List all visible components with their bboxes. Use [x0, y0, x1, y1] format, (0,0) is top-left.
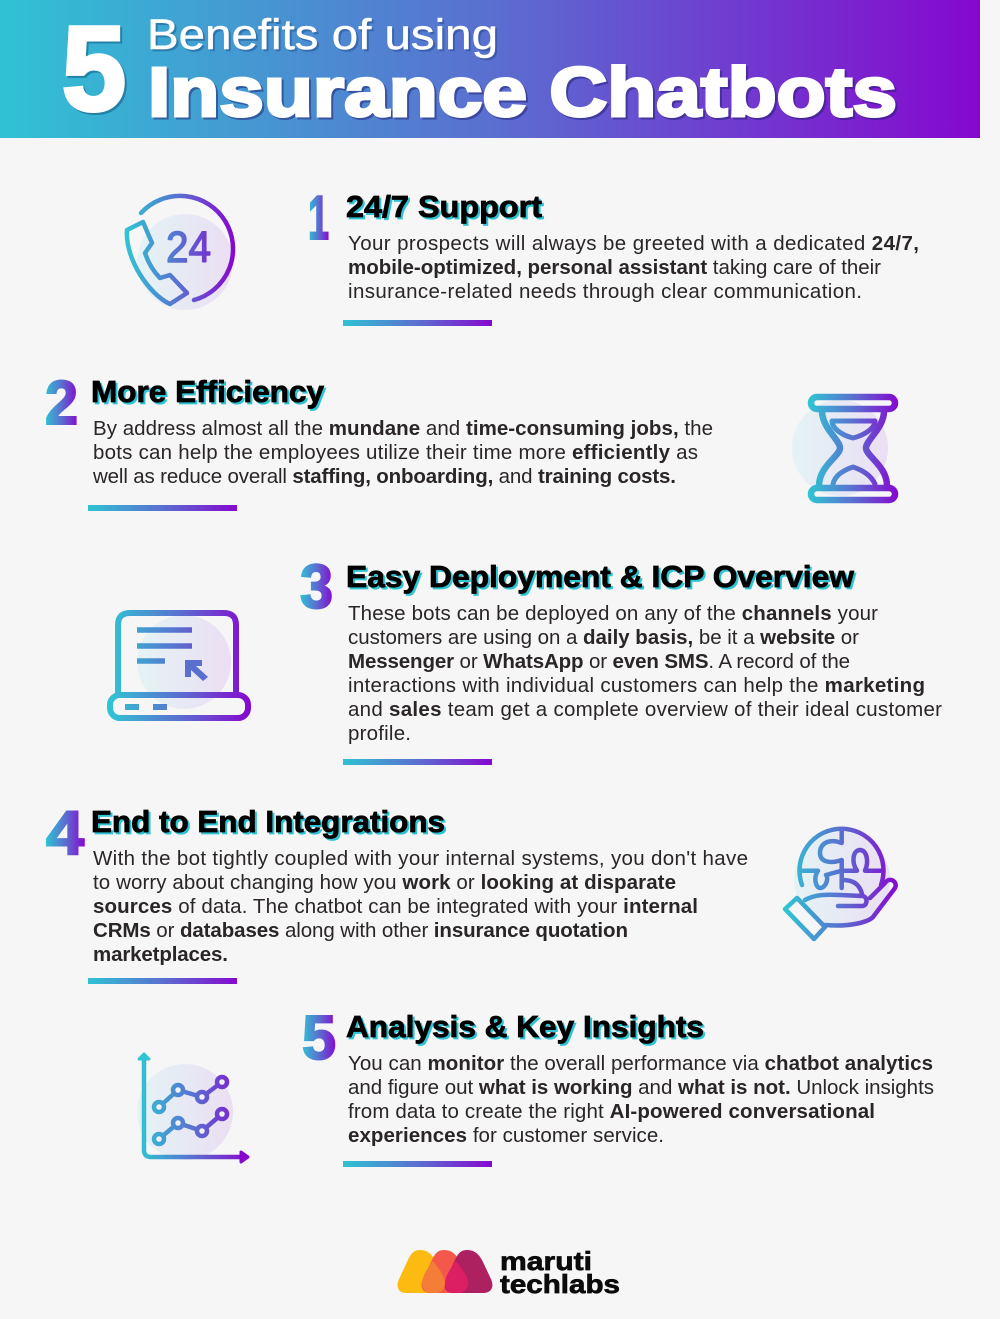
body text: and figure out what is working and what is not. Unlock insights [348, 1076, 934, 1099]
body text: These bots can be deployed on any of the channels your [348, 602, 878, 625]
icon: puzzle in hand [785, 829, 896, 939]
body text [348, 602, 942, 745]
body text [348, 1052, 934, 1147]
body text: CRMs or databases along with other insurance quotation [93, 919, 628, 942]
heading: More Efficiency [91, 374, 325, 409]
body text [348, 232, 919, 303]
body text: well as reduce overall staffing, onboarding, and training costs. [92, 465, 676, 488]
body text: marketplaces. [93, 943, 228, 966]
body text: customers are using on a daily basis, be it a website or [348, 626, 859, 649]
divider bar [343, 1161, 492, 1167]
title banner: Insurance Chatbots [148, 53, 897, 131]
section 5: analysis [137, 1004, 934, 1167]
icon: laptop [110, 613, 248, 718]
number 3: 3 [300, 553, 333, 622]
body text: insurance-related needs through clear communication. [348, 280, 862, 303]
heading: Easy Deployment & ICP Overview [346, 559, 855, 594]
title banner [0, 0, 980, 138]
title banner: 5 [62, 2, 126, 136]
body text: from data to create the right AI-powered conversational [348, 1100, 875, 1123]
divider bar [88, 978, 237, 984]
heading: 24/7 Support [346, 189, 542, 224]
body text: mobile-optimized, personal assistant taking care of their [348, 256, 881, 279]
icon: phone 24: 24 [166, 223, 211, 272]
body text: By address almost all the mundane and time-consuming jobs, the [93, 417, 713, 440]
body text: Messenger or WhatsApp or even SMS. A record of the [348, 650, 850, 673]
body text: experiences for customer service. [348, 1124, 664, 1147]
number 1: 1 [308, 184, 329, 253]
logo mark [398, 1250, 492, 1293]
body text: sources of data. The chatbot can be integrated with your internal [93, 895, 698, 918]
body text: and sales team get a complete overview of their ideal customer [348, 698, 942, 721]
body text: You can monitor the overall performance via chatbot analytics [348, 1052, 933, 1075]
icon: phone 24 [127, 196, 233, 310]
divider bar [343, 320, 492, 326]
section 4: integrations [46, 799, 896, 984]
section 1: 24/7 support [127, 184, 919, 326]
title banner: Benefits of using [147, 11, 498, 59]
icon: hourglass [792, 397, 895, 500]
divider bar [88, 505, 237, 511]
body text [92, 417, 713, 488]
divider bar [343, 759, 492, 765]
heading: Analysis & Key Insights [346, 1009, 704, 1044]
logo: maruti techlabs: techlabs [500, 1269, 620, 1299]
icon: line chart [137, 1054, 248, 1162]
number 2: 2 [45, 369, 78, 438]
number 4: 4 [46, 799, 85, 868]
body text: to worry about changing how you work or looking at disparate [93, 871, 676, 894]
body text: Your prospects will always be greeted with a dedicated 24/7, [348, 232, 919, 255]
heading: End to End Integrations [91, 804, 445, 839]
logo wordmark: maruti [500, 1246, 592, 1276]
body text [93, 847, 748, 966]
section 2: more efficiency [45, 369, 895, 511]
logo: maruti techlabs [398, 1246, 620, 1299]
body text: bots can help the employees utilize their time more efficiently as [93, 441, 698, 464]
body text: interactions with individual customers can help the marketing [348, 674, 925, 697]
body text: profile. [348, 722, 411, 745]
body text: With the bot tightly coupled with your internal systems, you don't have [93, 847, 748, 870]
section 3: easy deployment [110, 553, 942, 765]
number 5: 5 [302, 1004, 336, 1073]
